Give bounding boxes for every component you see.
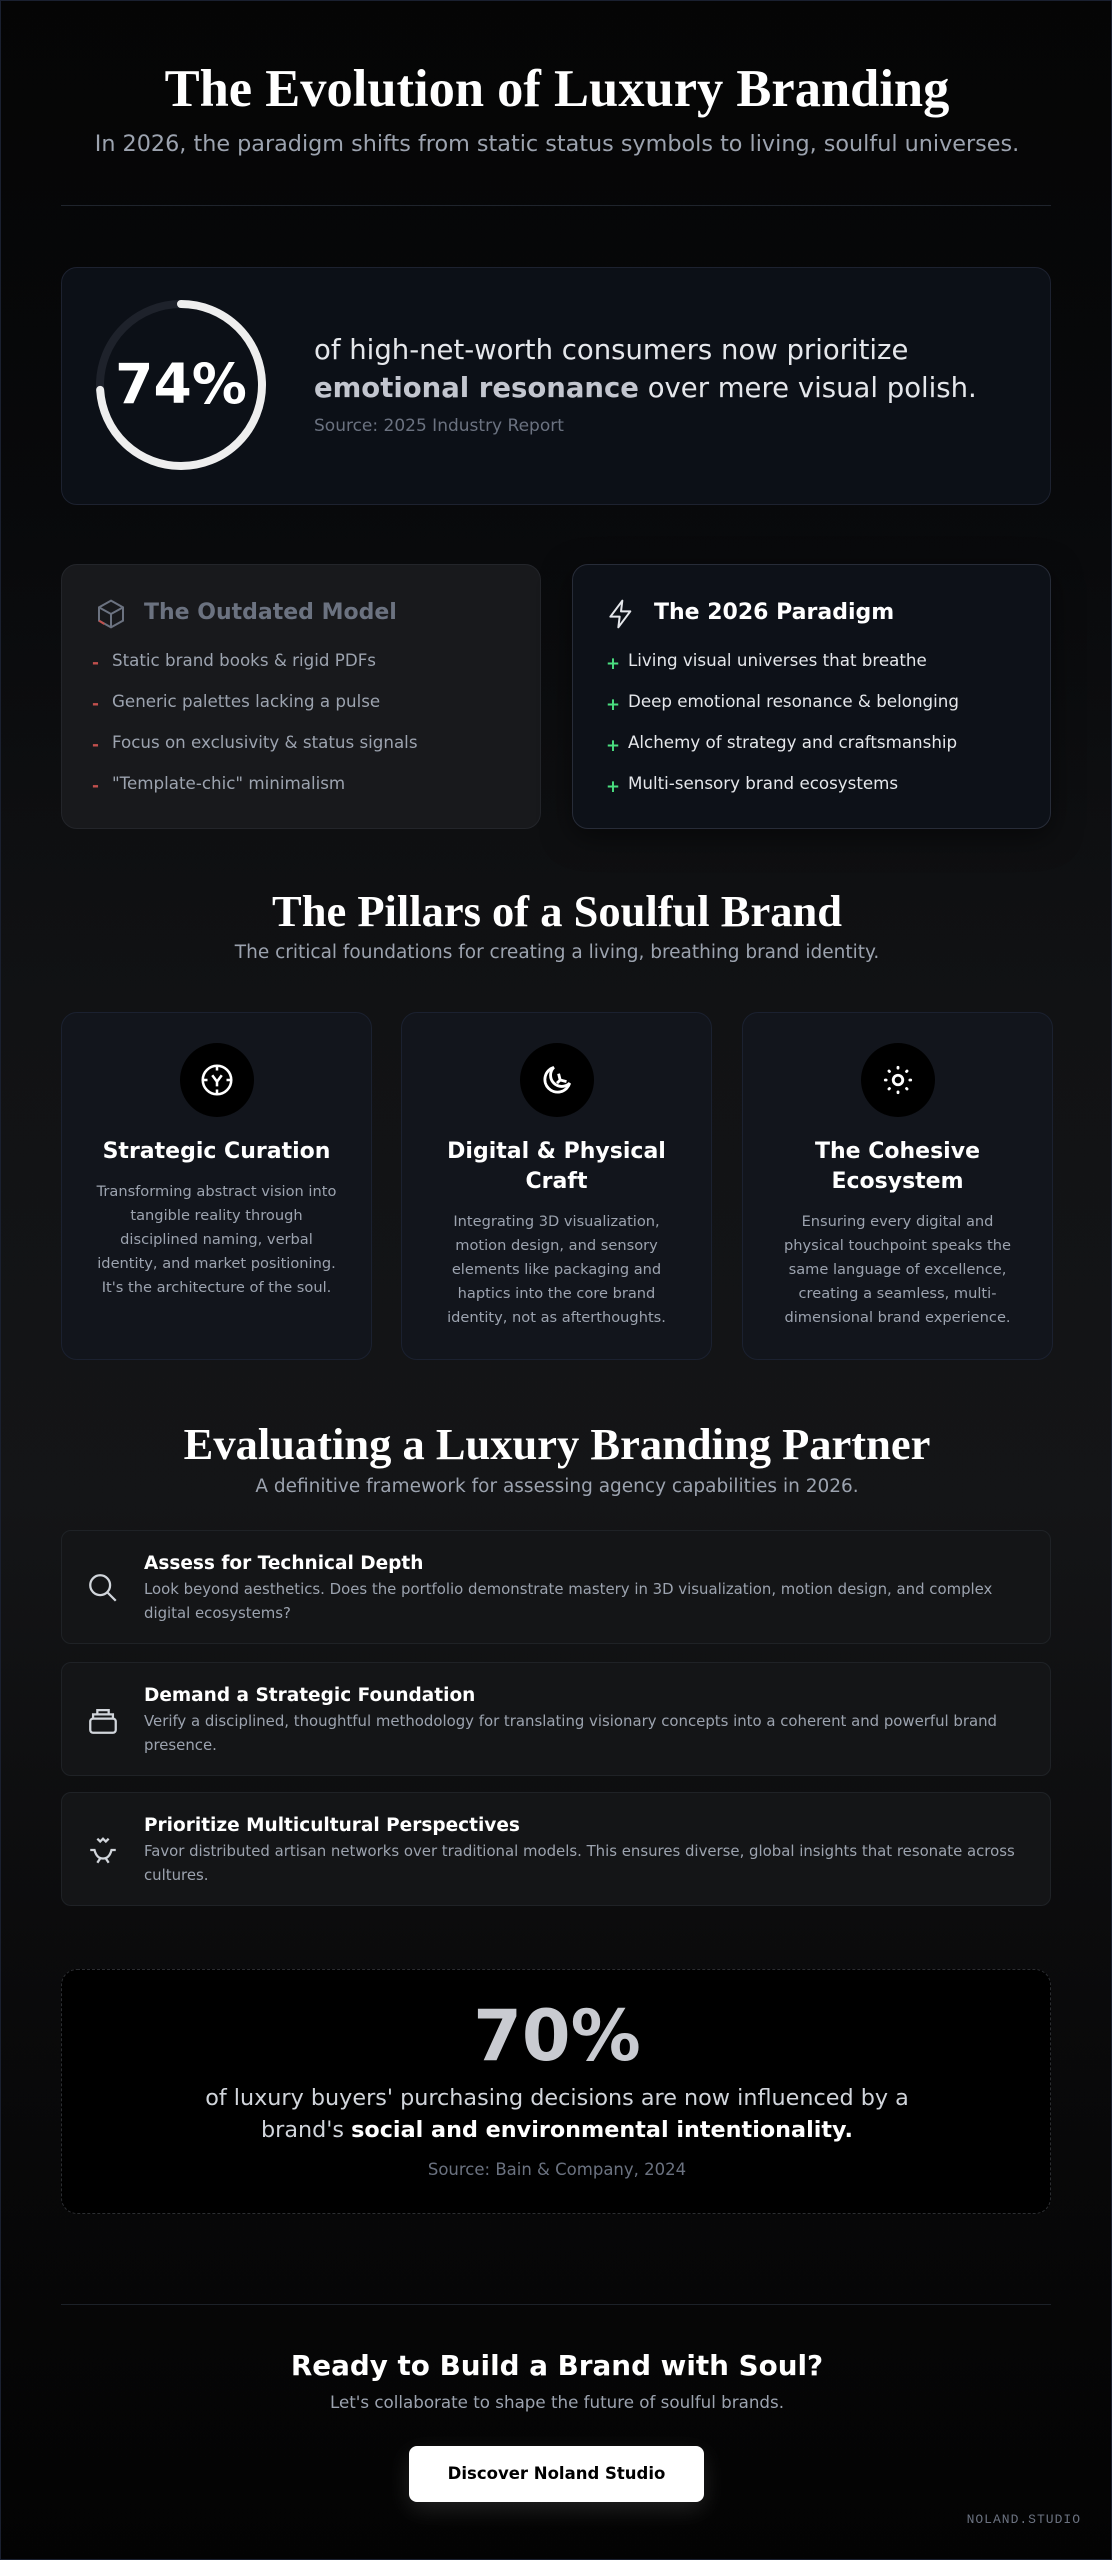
row: technical depth: Assess for Technical Depth (144, 1553, 423, 1574)
list: "Template-chic" minimalism (112, 773, 345, 793)
row: strategic foundation: Demand a Strategic Foundation (144, 1685, 475, 1706)
list: Deep emotional resonance & belonging (628, 691, 959, 711)
panel: cohesive ecosystem: The Cohesive (815, 1139, 980, 1164)
list: Living visual universes that breathe (628, 650, 927, 670)
heading: pillars: The Pillars of a Soulful Brand (272, 886, 842, 936)
panel: strategic curation: Strategic Curation (103, 1139, 330, 1164)
list (92, 650, 418, 795)
ring chart (96, 300, 266, 470)
list: + (606, 694, 620, 714)
panel: digital & physical craft: Digital & Physical (447, 1139, 666, 1164)
icon: moon (520, 1043, 594, 1117)
heading: evaluating: Evaluating a Luxury Branding Partner (184, 1419, 930, 1469)
stat text: of high-net-worth consumers now prioritize (314, 334, 908, 366)
list: + (606, 653, 620, 673)
panel: 70% stat (61, 1969, 1051, 2214)
button (409, 2446, 704, 2502)
icon: bolt (609, 600, 632, 628)
stat text (314, 334, 977, 404)
list: + (606, 735, 620, 755)
list: Multi-sensory brand ecosystems (628, 773, 898, 793)
stat number: 74% (115, 352, 247, 416)
footer brand: NOLAND.STUDIO (967, 2512, 1081, 2527)
row: technical depth: Look beyond aesthetics. Does the portfolio demonstrate mastery in 3D visualization, motion design, and complex digital ecosystems? (144, 1580, 992, 1622)
row: technical depth (61, 1530, 1051, 1644)
subtitle: evaluating: A definitive framework for assessing agency capabilities in 2026. (255, 1476, 859, 1497)
row: multicultural (61, 1792, 1051, 1906)
panel: 74% stat (61, 267, 1051, 505)
panel: cohesive ecosystem (742, 1012, 1053, 1360)
source: Source: 2025 Industry Report (314, 416, 564, 436)
panel: 2026 paradigm (572, 564, 1051, 829)
row: strategic foundation: Verify a disciplined, thoughtful methodology for translating visionary concepts into a coherent and powerful brand presence. (144, 1712, 997, 1754)
subtitle: In 2026, the paradigm shifts from static status symbols to living, soulful universes. (95, 131, 1019, 157)
CTA subtitle: Let's collaborate to shape the future of soulful brands. (330, 2392, 784, 2412)
list (606, 650, 959, 796)
stat text: of luxury buyers' purchasing decisions are now influenced by a brand's social and environmental intentionality. (205, 2085, 909, 2143)
list: - (92, 775, 99, 795)
panel: cohesive ecosystem: Ecosystem (831, 1169, 964, 1194)
list: - (92, 734, 99, 754)
panel: outdated model (61, 564, 541, 829)
list: Static brand books & rigid PDFs (112, 650, 376, 670)
title: The Evolution of Luxury Branding (165, 60, 949, 118)
list: - (92, 652, 99, 672)
icon: cube (98, 600, 124, 628)
panel: digital & physical craft (401, 1012, 712, 1360)
heading: The 2026 Paradigm (654, 600, 894, 625)
subtitle: pillars: The critical foundations for creating a living, breathing brand identity. (235, 942, 879, 963)
CTA heading: Ready to Build a Brand with Soul? (291, 2349, 823, 2382)
list: Alchemy of strategy and craftsmanship (628, 732, 957, 752)
stat number: 70% (473, 1995, 641, 2077)
row: multicultural: Favor distributed artisan networks over traditional models. This ensures diverse, global insights that resonate across cultures. (144, 1842, 1015, 1884)
panel: digital & physical craft: Integrating 3D visualization, motion design, and sensory elements like packaging and haptics into the core brand identity, not as afterthoughts. (447, 1213, 666, 1326)
icon: search (89, 1574, 116, 1602)
heading: The Outdated Model (144, 600, 397, 625)
list: Generic palettes lacking a pulse (112, 691, 380, 711)
icon: stack (89, 1709, 117, 1734)
stat text: emotional resonance over mere visual polish. (314, 372, 977, 404)
icon: network (90, 1837, 116, 1864)
row: multicultural: Prioritize Multicultural Perspectives (144, 1815, 520, 1836)
panel: strategic curation (61, 1012, 372, 1360)
source: Source: Bain & Company, 2024 (428, 2160, 686, 2179)
list: + (606, 776, 620, 796)
button: Discover Noland Studio (448, 2464, 665, 2483)
list: - (92, 693, 99, 713)
row: strategic foundation (61, 1662, 1051, 1776)
icon: sun (861, 1043, 935, 1117)
panel: strategic curation: Transforming abstract vision into tangible reality through disciplined naming, verbal identity, and market positioning. It's the architecture of the soul. (97, 1183, 336, 1296)
list: Focus on exclusivity & status signals (112, 732, 418, 752)
panel: cohesive ecosystem: Ensuring every digital and physical touchpoint speaks the same language of excellence, creating a seamless, multi-dimensional brand experience. (784, 1213, 1011, 1326)
icon: compass (180, 1043, 254, 1117)
panel: digital & physical craft: Craft (526, 1169, 587, 1194)
